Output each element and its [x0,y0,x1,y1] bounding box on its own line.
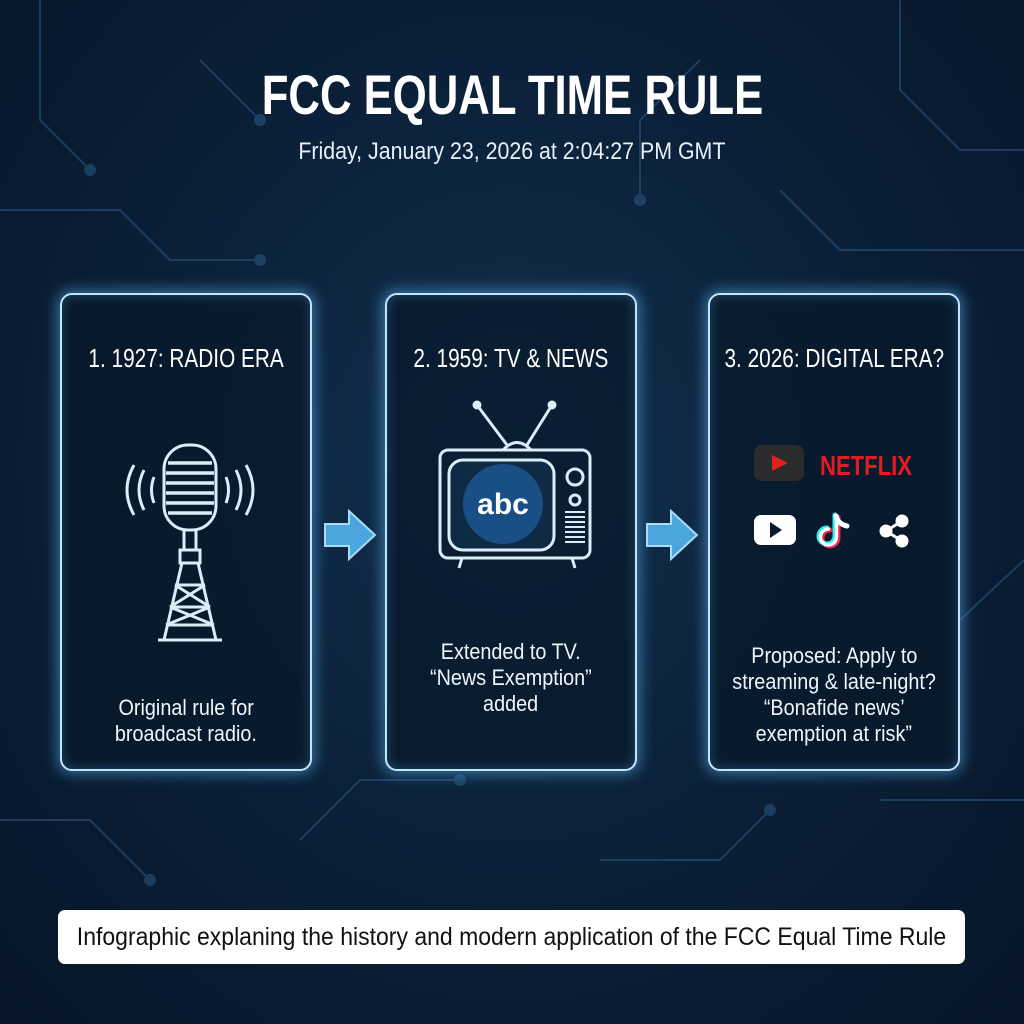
panel: 1959 TV & news [385,293,637,771]
caption [58,910,965,964]
panel: 2026 digital era [708,293,960,771]
panel: 1959 TV & news: 2. 1959: TV & NEWS [414,343,608,373]
panel: 1927 radio era: 1. 1927: RADIO ERA [88,343,284,373]
panel: 1959 TV & news: “News Exemption” [430,665,592,690]
panel: 2026 digital era: Proposed: Apply to [751,643,917,668]
panel: 1927 radio era: Original rule for [118,695,254,720]
panel: 1959 TV & news: Extended to TV. [441,639,581,664]
icons: streaming logos [754,445,912,548]
panel: 2026 digital era: 3. 2026: DIGITAL ERA? [724,343,944,373]
arrow 2 [646,508,698,562]
subtitle date: Friday, January 23, 2026 at 2:04:27 PM GMT [298,138,726,165]
icon: tv with abc: abc [477,488,529,521]
panel: 2026 digital era: exemption at risk” [756,721,912,746]
panel: 2026 digital era: “Bonafide news’ [764,695,904,720]
caption: Infographic explaning the history and modern application of the FCC Equal Time Rule [77,923,946,951]
icon: microphone tower [126,444,254,642]
panel: 2026 digital era: streaming & late-night? [732,669,936,694]
icon: tv with abc [438,400,592,568]
title: FCC EQUAL TIME RULE [261,63,763,126]
arrow 1 [324,508,376,562]
panel: 1927 radio era: broadcast radio. [115,721,257,746]
panel: 1927 radio era [60,293,312,771]
panel: 1959 TV & news: added [483,691,539,716]
